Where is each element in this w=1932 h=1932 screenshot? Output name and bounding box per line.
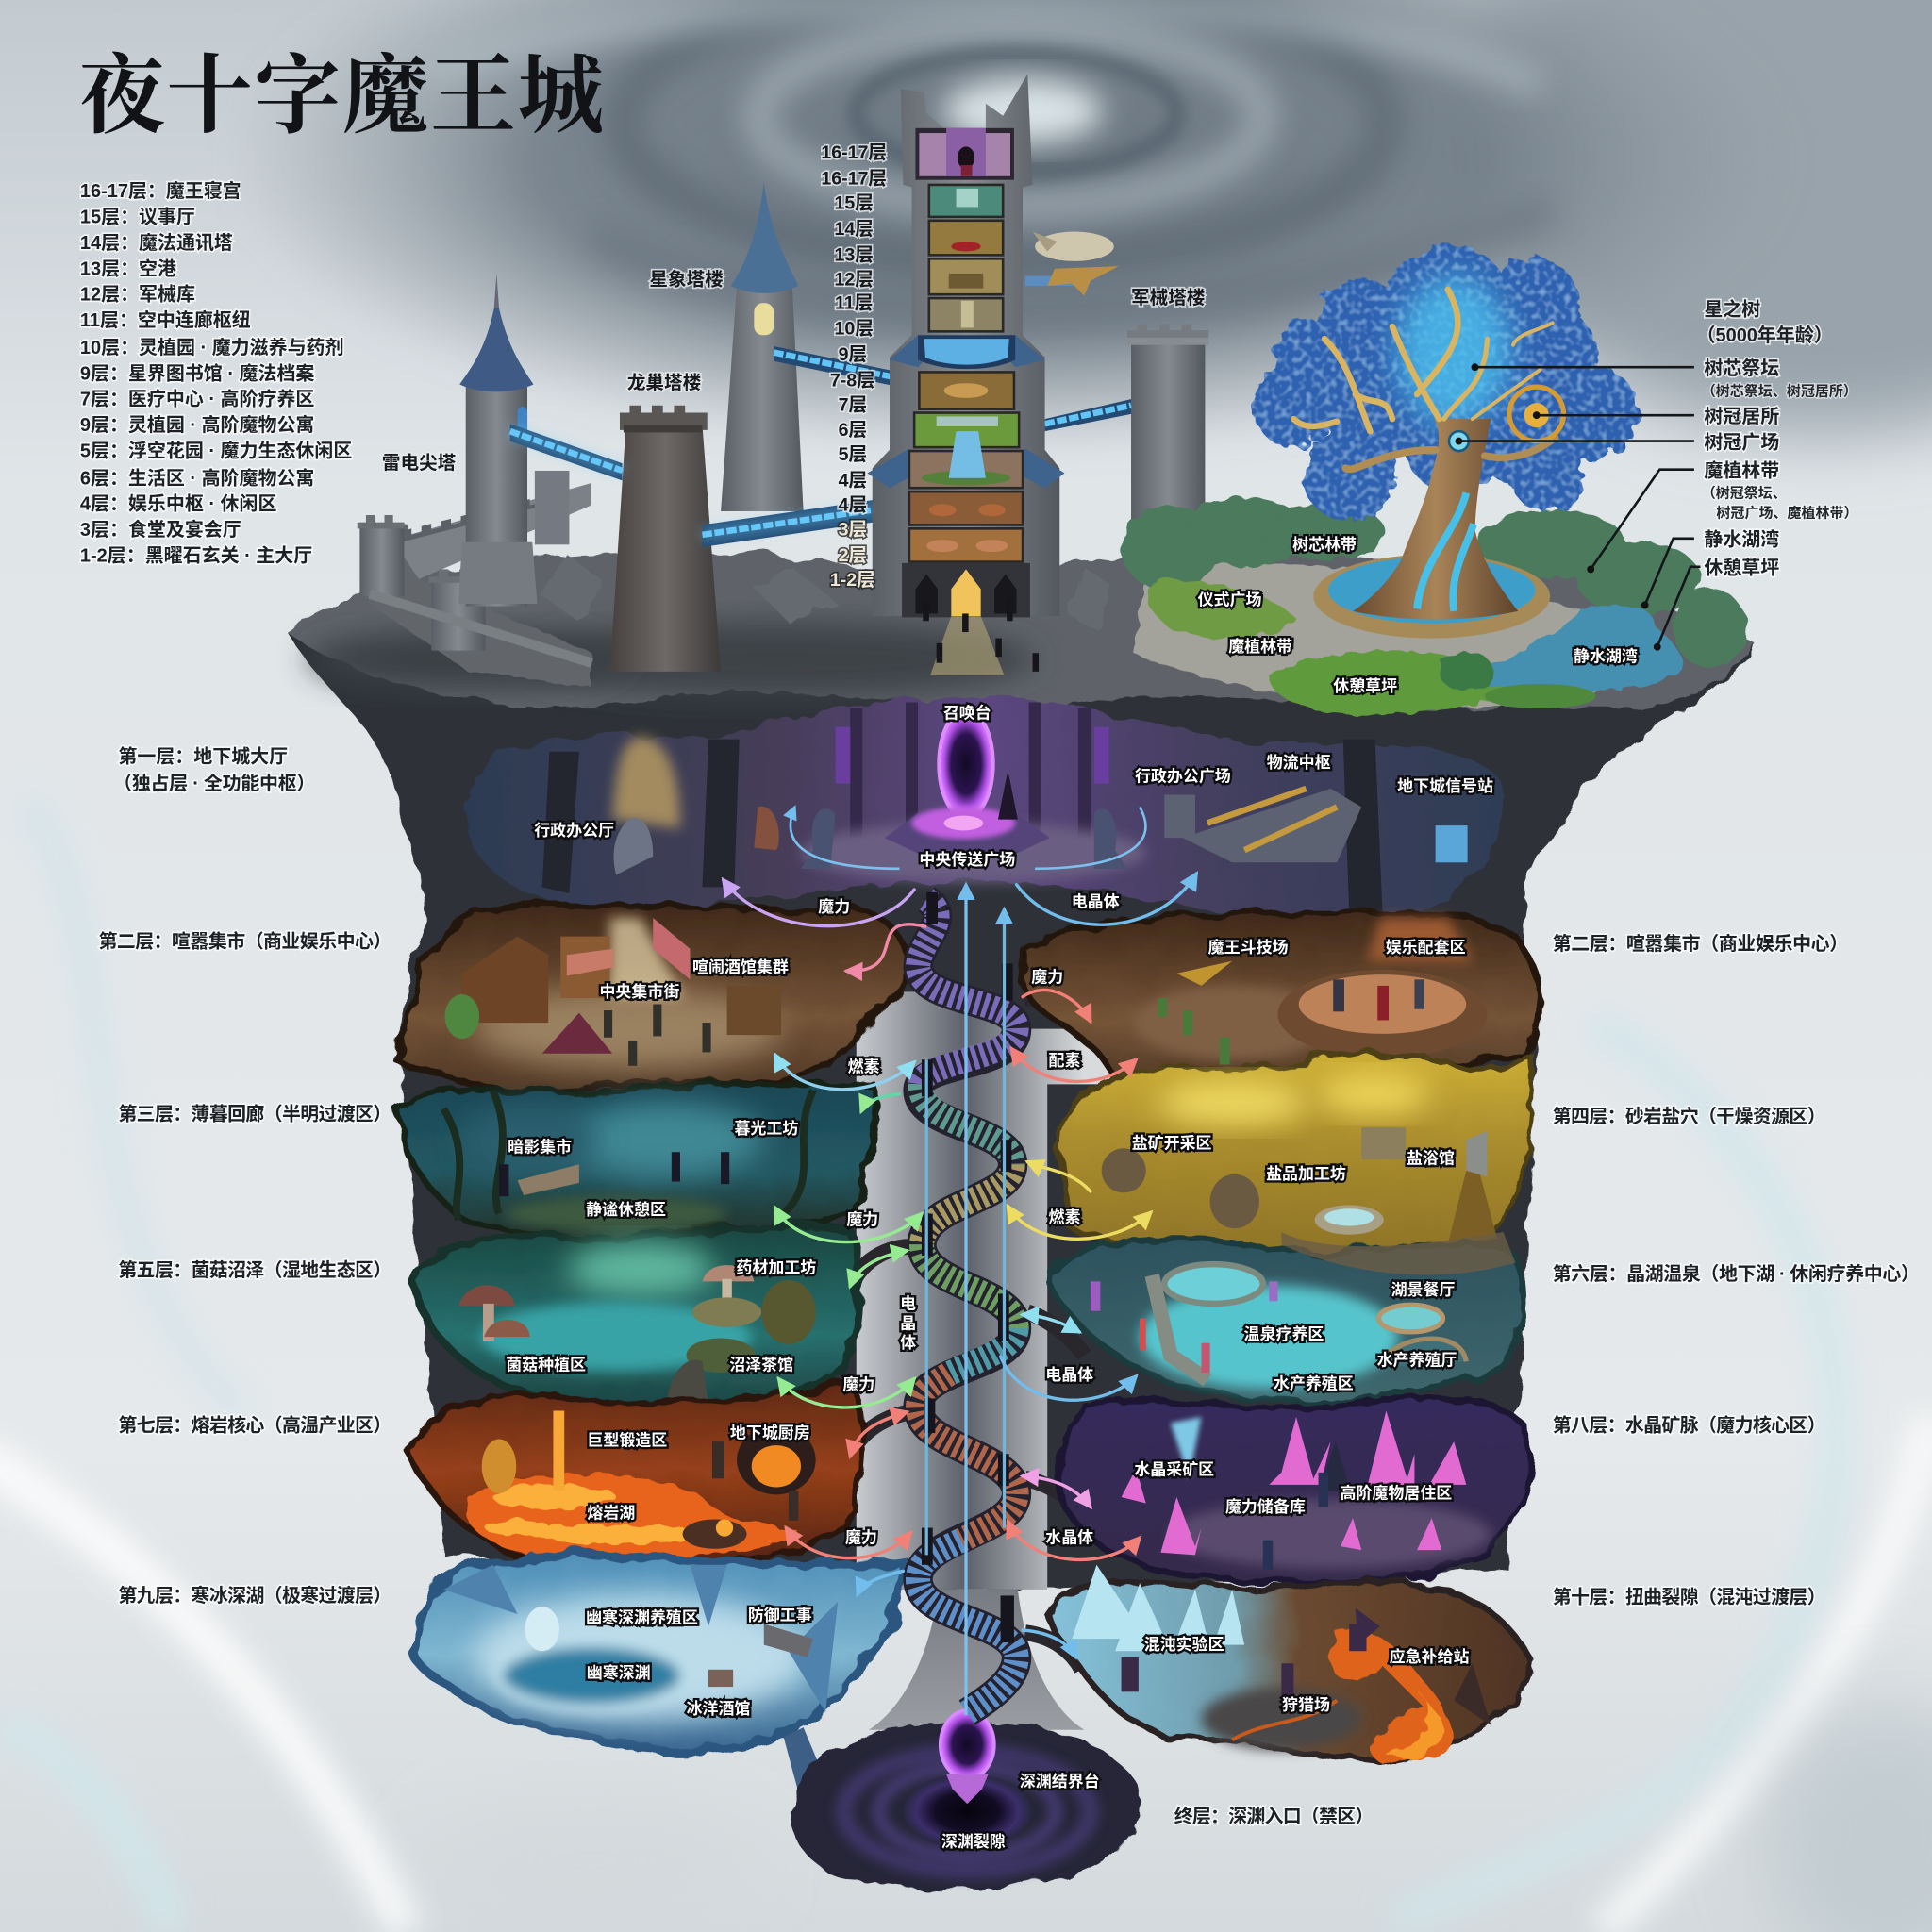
tower floor labels: 14层	[834, 219, 874, 240]
cave room labels: 燃素	[1049, 1208, 1080, 1226]
star tree callouts: 树冠广场	[1704, 431, 1779, 453]
cave room labels: 菌菇种植区	[506, 1356, 586, 1374]
cave room labels: 水产养殖区	[1274, 1374, 1354, 1392]
tower floor list: 9层：灵植园 · 高阶魔物公寓	[80, 413, 314, 436]
cave: floor 3 twilight corridor	[397, 1083, 875, 1240]
cave room labels: 温泉疗养区	[1244, 1324, 1324, 1343]
tower floor list: 13层：空港	[80, 258, 176, 279]
cave: floor 5 mushroom swamp	[413, 1226, 857, 1417]
tower: 星象塔楼	[721, 182, 804, 511]
tower floor list: 4层：娱乐中枢 · 休闲区	[80, 493, 276, 515]
underground floor side labels: 终层：深渊入口（禁区）	[1174, 1806, 1374, 1827]
tower floor labels: 11层	[835, 292, 873, 313]
cave room labels: 燃素	[848, 1058, 880, 1076]
tower floor list: 9层：星界图书馆 · 魔法档案	[80, 362, 314, 384]
cave room labels: 娱乐配套区	[1386, 938, 1466, 957]
garden labels: 休憩草坪	[1333, 677, 1397, 695]
underground floor side labels: 第一层：地下城大厅	[118, 745, 288, 767]
star tree callouts: 休憩草坪	[1704, 558, 1779, 579]
transport arrows between floors	[724, 874, 1196, 1657]
cave room labels: 体	[900, 1334, 916, 1352]
cave room labels: 应急补给站	[1390, 1647, 1470, 1666]
cave room labels: 喧闹酒馆集群	[692, 958, 789, 976]
cave: floor 8 crystal vein	[1058, 1397, 1529, 1583]
cave room labels: 电晶体	[1072, 893, 1120, 911]
tower floor labels: 6层	[839, 420, 867, 441]
cave room labels: 行政办公广场	[1135, 767, 1231, 785]
tower floor labels: 2层	[839, 545, 867, 566]
cave room labels: 地下城厨房	[730, 1424, 810, 1442]
cave: floor 6 crystal lake spa	[1047, 1232, 1523, 1405]
castle tower labels	[382, 269, 1206, 474]
cave room labels: 中央集市街	[599, 982, 679, 1001]
tower floor list: 11层：空中连廊枢纽	[80, 308, 251, 331]
cave room labels	[506, 704, 1493, 1851]
summoning portal	[912, 709, 1015, 839]
stair figures	[922, 892, 1014, 1642]
tower floor labels: 4层	[839, 470, 867, 491]
cave room labels: 水产养殖厅	[1377, 1350, 1457, 1369]
star tree callouts: 静水湖湾	[1704, 528, 1779, 551]
star tree callouts: 树冠居所	[1704, 406, 1779, 427]
underground floor side labels: 第四层：砂岩盐穴（干燥资源区）	[1553, 1106, 1826, 1127]
star tree callouts: 魔植林带	[1704, 458, 1779, 481]
tower floor labels: 10层	[834, 319, 874, 340]
castle tower labels: 龙巢塔楼	[627, 373, 702, 393]
abyss portal	[941, 1710, 994, 1804]
tree trunk	[1353, 419, 1518, 620]
tower floor labels: 7层	[839, 395, 867, 416]
tower floor list: 14层：魔法通讯塔	[80, 232, 233, 254]
underground floor side labels: 第二层：喧嚣集市（商业娱乐中心）	[1553, 932, 1848, 955]
tower floor list: 15层：议事厅	[80, 206, 195, 227]
garden labels: 静水湖湾	[1574, 647, 1638, 666]
cave room labels: 混沌实验区	[1144, 1635, 1224, 1654]
floating island rock body	[286, 631, 1752, 1590]
tower floor list: 7层：医疗中心 · 高阶疗养区	[80, 388, 314, 410]
castle tower labels: 军械塔楼	[1131, 288, 1206, 308]
underground floor side labels	[98, 745, 1920, 1827]
tower gate	[902, 563, 1030, 675]
tower floor labels: 12层	[834, 269, 874, 290]
star tree callouts: （树冠祭坛、	[1702, 485, 1787, 502]
cave room labels: 晶	[900, 1314, 916, 1332]
garden labels: 仪式广场	[1198, 591, 1261, 609]
central shaft	[857, 991, 1115, 1730]
cave room labels: 魔王斗技场	[1208, 938, 1289, 957]
tower floor labels: 16-17层	[821, 142, 887, 163]
bridges from caves to stairs	[850, 952, 1103, 1670]
cave room labels: 深渊裂隙	[941, 1833, 1006, 1851]
castle tower labels: 雷电尖塔	[382, 453, 457, 474]
cave: floor 9 frozen lake	[413, 1555, 901, 1802]
garden labels	[1198, 536, 1638, 695]
underground floor side labels: 第二层：喧嚣集市（商业娱乐中心）	[98, 929, 391, 952]
cave room labels: 巨型锻造区	[587, 1431, 667, 1449]
tower floor labels: 9层	[839, 344, 867, 365]
cave room labels: 狩猎场	[1282, 1695, 1330, 1714]
cave room labels: 高阶魔物居住区	[1340, 1484, 1452, 1503]
cave room labels: 熔岩湖	[587, 1503, 635, 1522]
garden labels: 树芯林带	[1292, 536, 1357, 554]
cave room labels: 地下城信号站	[1397, 776, 1493, 795]
airship and golden dragon	[1033, 232, 1119, 295]
garden: forest, lawns and lake	[1122, 498, 1747, 715]
underground floor side labels: 第六层：晶湖温泉（地下湖 · 休闲疗养中心）	[1553, 1262, 1920, 1285]
island surface ground	[286, 542, 1752, 709]
cave room labels: 行政办公厅	[534, 822, 614, 840]
tower floor labels	[821, 142, 887, 591]
central tower	[868, 74, 1064, 675]
underground floor side labels: 第七层：熔岩核心（高温产业区）	[118, 1414, 391, 1437]
cave: floor 7 lava core	[410, 1386, 863, 1572]
cave: floor 4 salt cavern	[1058, 1053, 1536, 1265]
tower floor labels: 13层	[834, 244, 874, 265]
vertical mana conduits	[926, 885, 1004, 1715]
cave room labels: 暗影集市	[508, 1138, 572, 1157]
tower floor list: 6层：生活区 · 高阶魔物公寓	[80, 466, 314, 489]
star tree	[1253, 244, 1639, 639]
cave room labels: 魔力	[846, 1210, 878, 1229]
cave room labels: 幽寒深渊	[587, 1663, 651, 1682]
cave: floor 10 twisted rift	[1047, 1565, 1534, 1762]
underground floor side labels: 第十层：扭曲裂隙（混沌过渡层）	[1553, 1586, 1826, 1607]
star tree callouts: 树芯祭坛	[1704, 358, 1779, 379]
cave: floor 2 right arena	[1023, 912, 1541, 1090]
tower rooms	[908, 128, 1024, 563]
glowing sky bridges	[510, 276, 1131, 547]
cave room labels: 药材加工坊	[736, 1258, 816, 1277]
spiral staircase	[918, 892, 1017, 1713]
tower floor list: 5层：浮空花园 · 魔力生态休闲区	[80, 440, 352, 462]
cave room labels: 魔力储备库	[1225, 1497, 1306, 1516]
underground floor side labels: （独占层 · 全功能中枢）	[113, 772, 315, 794]
underground floor side labels: 第五层：菌菇沼泽（湿地生态区）	[118, 1258, 391, 1281]
cave room labels: 深渊结界台	[1020, 1772, 1100, 1790]
tower floor list: 1-2层：黑曜石玄关 · 主大厅	[80, 545, 312, 567]
tower floor labels: 7-8层	[830, 371, 875, 391]
tower floor labels: 3层	[839, 520, 867, 541]
cave room labels: 盐浴馆	[1407, 1148, 1455, 1167]
cave room labels: 电晶体	[1045, 1366, 1093, 1384]
cave room labels: 盐品加工坊	[1266, 1164, 1346, 1183]
tower floor labels: 4层	[839, 495, 867, 516]
star tree callouts: 树冠广场、魔植林带）	[1716, 505, 1858, 522]
tower floor labels: 16-17层	[821, 168, 887, 189]
tower floor labels: 1-2层	[830, 570, 875, 591]
cave: floor 1 dungeon hall	[463, 696, 1504, 920]
cave room labels: 湖景餐厅	[1391, 1281, 1456, 1299]
cave room labels: 电	[900, 1294, 916, 1312]
tree fountain	[1313, 555, 1550, 639]
cave room labels: 魔力	[845, 1528, 877, 1547]
star tree callouts: （5000年年龄）	[1697, 325, 1833, 346]
cave room labels: 水晶采矿区	[1134, 1461, 1214, 1479]
cave room labels: 冰洋酒馆	[687, 1699, 750, 1718]
star tree callouts: （树芯祭坛、树冠居所）	[1702, 382, 1857, 399]
tower floor list: 16-17层：魔王寝宫	[80, 179, 242, 202]
star tree callouts: 星之树	[1704, 297, 1760, 320]
tower floor labels: 5层	[839, 444, 867, 465]
tree foliage	[1253, 244, 1639, 521]
cave room labels: 暮光工坊	[734, 1119, 798, 1138]
star tree callouts	[1456, 297, 1858, 651]
cave room labels: 魔力	[842, 1375, 874, 1394]
tower floor list	[80, 179, 352, 567]
tiny figures	[923, 599, 1039, 672]
cave room labels: 沼泽茶馆	[729, 1356, 793, 1374]
tower: 军械塔楼	[1127, 325, 1208, 547]
castle tower labels: 星象塔楼	[649, 269, 724, 290]
tower floor labels: 15层	[834, 193, 874, 214]
tower floor list: 3层：食堂及宴会厅	[80, 518, 242, 541]
cave room labels: 静谧休憩区	[586, 1201, 666, 1219]
cave room labels: 防御工事	[748, 1606, 812, 1624]
cave room labels: 魔力	[1031, 967, 1063, 986]
cave room labels: 配素	[1049, 1052, 1080, 1070]
cave: floor 2 left market	[397, 904, 907, 1092]
cave room labels: 盐矿开采区	[1132, 1135, 1212, 1153]
tower: 雷电尖塔	[458, 274, 537, 607]
cave room labels: 水晶体	[1045, 1529, 1093, 1547]
tree branches	[1293, 290, 1555, 469]
tower floor list: 10层：灵植园 · 魔力滋养与药剂	[80, 336, 343, 358]
title: 夜十字魔王城	[79, 49, 604, 144]
cave: abyss entrance	[789, 1710, 1141, 1891]
left castle walls	[358, 471, 591, 688]
tower: 龙巢塔楼	[610, 406, 721, 672]
cave room labels: 幽寒深渊养殖区	[586, 1607, 698, 1626]
cave room labels: 物流中枢	[1267, 754, 1331, 772]
garden labels: 魔植林带	[1228, 637, 1292, 656]
underground floor side labels: 第八层：水晶矿脉（魔力核心区）	[1553, 1414, 1826, 1437]
cave room labels: 中央传送广场	[919, 850, 1015, 869]
cave room labels: 魔力	[818, 897, 850, 916]
underground floor side labels: 第三层：薄暮回廊（半明过渡区）	[118, 1102, 391, 1124]
tower floor list: 12层：军械库	[80, 284, 195, 306]
underground floor side labels: 第九层：寒冰深湖（极寒过渡层）	[118, 1584, 391, 1607]
cave room labels: 召唤台	[943, 704, 991, 723]
